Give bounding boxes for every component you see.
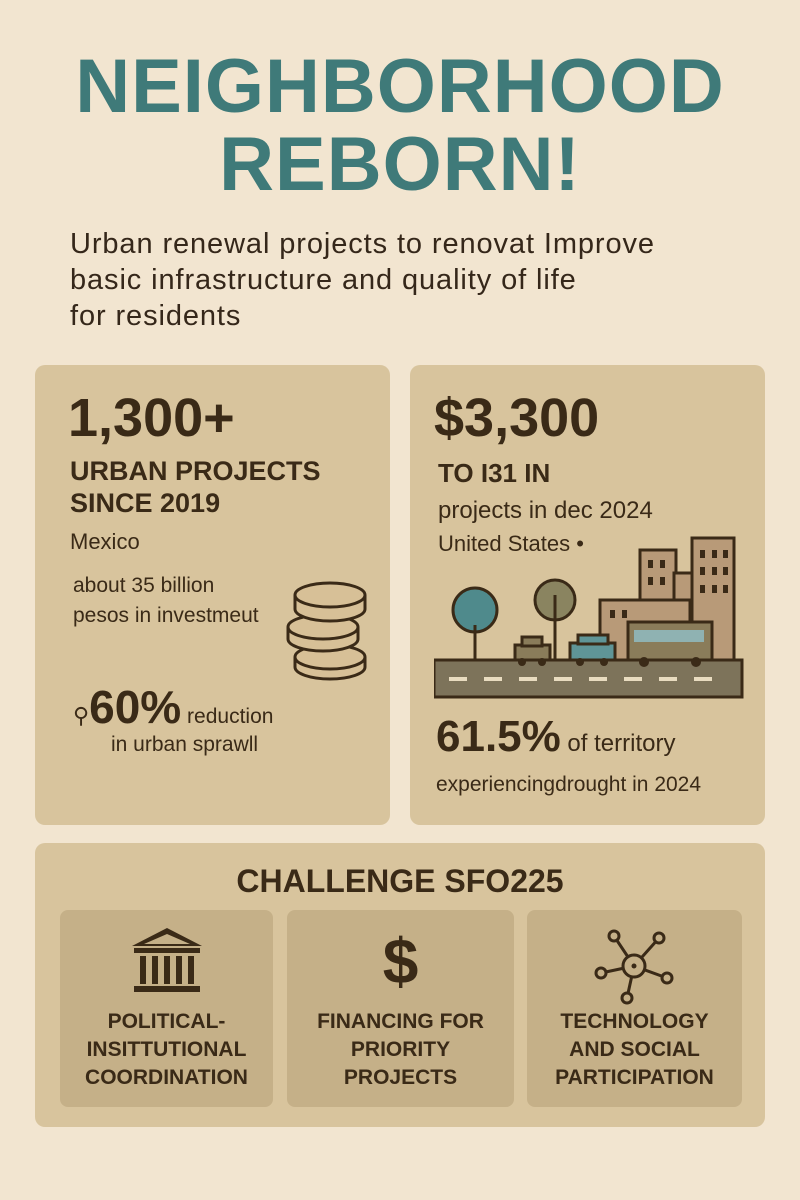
- card: financing: [287, 910, 514, 1107]
- stat: 61.5%: [436, 712, 701, 796]
- stat: 60%: in urban sprawll: [111, 733, 258, 756]
- title: [75, 44, 725, 207]
- city illustration: [434, 536, 744, 698]
- icon: building: [132, 928, 202, 992]
- investment text: pesos in investmeut: [73, 604, 259, 627]
- icon: dollar: $: [383, 925, 418, 997]
- text: TECHNOLOGY: [560, 1010, 709, 1033]
- country: Mexico: [70, 529, 140, 554]
- panel: challenge: [35, 843, 765, 1127]
- label: URBAN PROJECTS: [70, 456, 321, 486]
- title: REBORN!: [219, 122, 581, 207]
- title: NEIGHBORHOOD: [75, 44, 725, 129]
- label: projects in dec 2024: [438, 497, 653, 524]
- subtitle: basic infrastructure and quality of life: [70, 264, 577, 296]
- text: POLITICAL-: [108, 1010, 225, 1033]
- investment text: about 35 billion: [73, 574, 214, 597]
- label: [438, 458, 653, 524]
- text: [317, 1010, 484, 1089]
- text: PRIORITY: [351, 1038, 450, 1061]
- stat: 60%: [73, 681, 273, 756]
- stat: 61.5%: experiencingdrought in 2024: [436, 773, 701, 796]
- card: technology: [527, 910, 742, 1107]
- label: SINCE 2019: [70, 488, 220, 518]
- big number: $3,300: [434, 388, 599, 448]
- text: COORDINATION: [85, 1066, 248, 1089]
- big number: 1,300+: [68, 388, 235, 448]
- label: TO I31 IN: [438, 458, 550, 488]
- stat: 60%: ⚲60% reduction: [73, 681, 273, 733]
- text: [555, 1010, 714, 1089]
- heading: CHALLENGE SFO225: [236, 863, 564, 899]
- card: political: [60, 910, 273, 1107]
- icon: network: [594, 930, 674, 1004]
- panel: United States: [410, 365, 765, 825]
- investment text: [73, 574, 259, 627]
- panel: Mexico: [35, 365, 390, 825]
- subtitle: for residents: [70, 300, 241, 332]
- icon: coins: [286, 582, 366, 680]
- text: AND SOCIAL: [569, 1038, 700, 1061]
- text: PROJECTS: [344, 1066, 457, 1089]
- stat: 61.5%: 61.5% of territory: [436, 712, 675, 761]
- text: FINANCING FOR: [317, 1010, 484, 1033]
- subtitle: [70, 228, 655, 332]
- text: INSITTUTIONAL: [87, 1038, 246, 1061]
- label: [70, 456, 321, 518]
- text: [85, 1010, 248, 1089]
- country: United States •: [438, 531, 584, 556]
- subtitle: Urban renewal projects to renovat Improve: [70, 228, 655, 260]
- text: PARTICIPATION: [555, 1066, 714, 1089]
